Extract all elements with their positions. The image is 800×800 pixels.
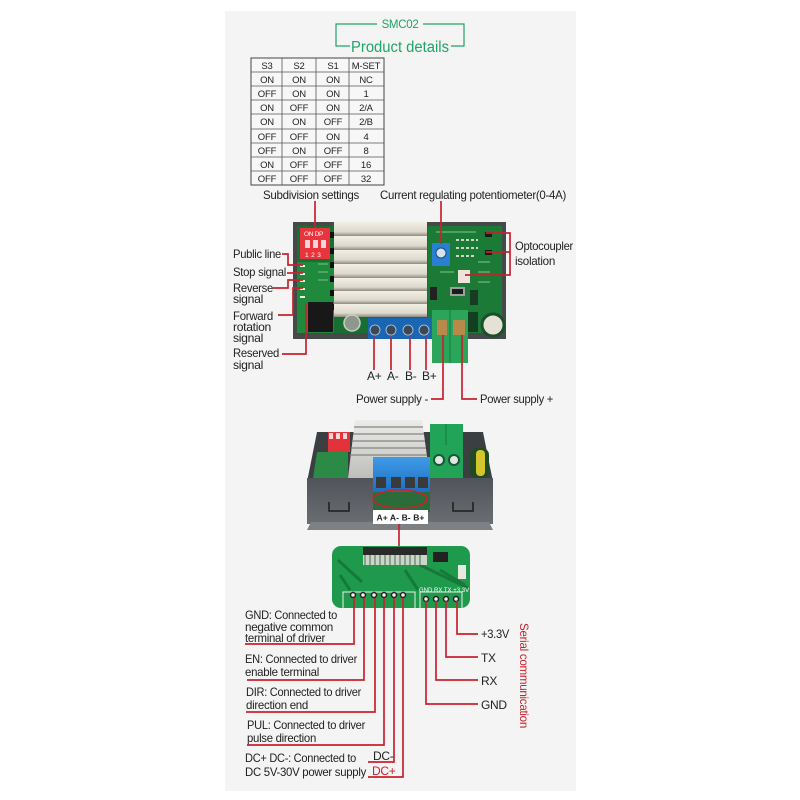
subdivision settings table: OFF	[290, 132, 309, 143]
label: forward rotation signal	[233, 288, 303, 345]
pin labels: A+ A- B- B+	[376, 512, 425, 522]
title	[336, 19, 464, 56]
logo	[344, 315, 360, 331]
label: reverse signal: Reverse	[233, 281, 274, 295]
subdivision settings table: OFF	[258, 174, 277, 185]
label: forward rotation signal: rotation	[233, 320, 271, 334]
label: serial communication: Serial communication	[517, 623, 531, 728]
subdivision settings table: OFF	[324, 146, 343, 157]
pins	[350, 592, 458, 602]
label: stop signal: Stop signal	[233, 265, 286, 279]
label: DC minus: DC-	[373, 749, 394, 763]
green power terminal	[432, 310, 478, 363]
IC chip	[308, 302, 333, 332]
subdivision settings table: OFF	[290, 160, 309, 171]
label: optocoupler isolation: isolation	[515, 254, 555, 268]
label: DC power: DC+ DC-: Connected to	[245, 751, 357, 765]
label: PUL: pulse direction	[247, 731, 316, 745]
blue terminal	[373, 457, 430, 492]
subdivision settings table	[251, 58, 384, 185]
label: motor terminals	[367, 338, 437, 383]
title: Product details	[351, 39, 449, 56]
dip switch: ON DP	[304, 231, 323, 238]
subdivision settings table: OFF	[258, 132, 277, 143]
label: current regulating potentiometer: Current regulating potentiometer(0-4A)	[380, 188, 566, 202]
top board photo	[293, 222, 506, 363]
label: EN: EN: Connected to driver	[245, 652, 357, 666]
label: DC minus	[368, 598, 394, 763]
label: reserved signal: Reserved	[233, 346, 279, 360]
label: DC plus	[368, 598, 403, 778]
label: RX	[436, 601, 497, 688]
label: GND driver	[245, 598, 354, 645]
optocouplers	[485, 232, 492, 237]
subdivision settings table: ON	[260, 117, 274, 128]
subdivision settings table: ON	[292, 89, 306, 100]
label: subdivision settings	[263, 188, 359, 228]
subdivision settings table: OFF	[258, 89, 277, 100]
subdivision settings table: ON	[326, 132, 340, 143]
label: +3.3V: +3.3V	[481, 627, 509, 641]
label: reverse signal	[233, 280, 303, 306]
label: DIR	[246, 598, 375, 712]
dip switch: 123	[305, 252, 323, 259]
subdivision settings table: ON	[292, 75, 306, 86]
label: motor terminals: A-	[387, 369, 399, 383]
label: power supply minus: Power supply -	[356, 392, 428, 406]
background panel	[225, 11, 576, 791]
label: GND driver: negative common	[245, 620, 333, 634]
label: public line: Public line	[233, 247, 282, 261]
label: TX: TX	[481, 651, 496, 665]
label: DIR: direction end	[246, 698, 308, 712]
subdivision settings table: 8	[363, 146, 369, 157]
subdivision settings table: ON	[260, 103, 274, 114]
label: EN	[245, 598, 364, 680]
subdivision settings table: 32	[361, 174, 371, 185]
label: motor terminals: B+	[422, 369, 437, 383]
green terminal	[430, 424, 463, 478]
subdivision settings table: ON	[260, 160, 274, 171]
label: GND serial	[426, 601, 507, 712]
heat sink	[348, 420, 430, 478]
subdivision settings table: 1	[363, 89, 369, 100]
label: optocoupler isolation: Optocoupler	[515, 239, 573, 253]
connector line	[398, 524, 400, 546]
pin header slot	[373, 492, 430, 512]
subdivision settings table: S1	[327, 61, 339, 72]
label: TX	[446, 601, 496, 665]
capacitor	[470, 448, 489, 478]
subdivision settings table: ON	[292, 146, 306, 157]
bottom PCB	[332, 546, 470, 608]
label: power supply plus: Power supply +	[480, 392, 553, 406]
label: reserved signal: signal	[233, 358, 263, 372]
bottom PCB: GND RX TX +3.3V	[419, 588, 469, 594]
label: forward rotation signal: signal	[233, 331, 263, 345]
subdivision settings table: 2/B	[359, 117, 373, 128]
label: forward rotation signal: Forward	[233, 309, 273, 323]
capacitor	[482, 314, 504, 336]
label: motor terminals: B-	[405, 369, 417, 383]
middle board photo	[307, 420, 493, 530]
label: power supply minus	[356, 335, 443, 406]
resistors	[430, 287, 478, 305]
subdivision settings table: 4	[363, 132, 369, 143]
label: DC power: DC 5V-30V power supply	[245, 765, 366, 779]
blue motor terminal	[368, 318, 432, 339]
label: reserved signal	[233, 303, 306, 372]
subdivision settings table: ON	[260, 75, 274, 86]
subdivision settings table: OFF	[324, 117, 343, 128]
dip switch	[300, 228, 330, 259]
label: RX: RX	[481, 674, 497, 688]
title: SMC02	[382, 19, 418, 31]
label: reverse signal: signal	[233, 292, 263, 306]
label: GND driver: GND: Connected to	[245, 608, 338, 622]
label: optocoupler isolation	[465, 233, 573, 275]
label: subdivision settings: Subdivision settings	[263, 188, 359, 202]
label: public line	[233, 247, 303, 265]
subdivision settings table: 16	[361, 160, 371, 171]
label: +3.3V	[457, 601, 509, 641]
subdivision settings table: 2/A	[359, 103, 374, 114]
potentiometer	[432, 243, 450, 266]
pin labels	[373, 510, 428, 524]
subdivision settings table: ON	[326, 89, 340, 100]
label: DIR: DIR: Connected to driver	[246, 685, 361, 699]
subdivision settings table: OFF	[324, 160, 343, 171]
label: PUL: PUL: Connected to driver	[247, 718, 365, 732]
label: motor terminals: A+	[367, 369, 382, 383]
label: DC power	[245, 751, 366, 779]
subdivision settings table: S2	[293, 61, 305, 72]
subdivision settings table: ON	[292, 117, 306, 128]
subdivision settings table: OFF	[290, 174, 309, 185]
heat sink	[330, 222, 427, 317]
label: GND driver: terminal of driver	[245, 631, 325, 645]
subdivision settings table: NC	[359, 75, 373, 86]
label: DC plus: DC+	[372, 764, 396, 778]
subdivision settings table: ON	[326, 75, 340, 86]
label: PUL	[247, 598, 384, 745]
label: GND serial: GND	[481, 698, 507, 712]
label: EN: enable terminal	[245, 665, 319, 679]
label: power supply plus	[462, 335, 553, 406]
subdivision settings table: OFF	[258, 146, 277, 157]
subdivision settings table: ON	[326, 103, 340, 114]
subdivision settings table: OFF	[290, 103, 309, 114]
subdivision settings table: M-SET	[352, 61, 381, 72]
subdivision settings table: S3	[261, 61, 273, 72]
subdivision settings table: OFF	[324, 174, 343, 185]
slots	[329, 502, 349, 511]
